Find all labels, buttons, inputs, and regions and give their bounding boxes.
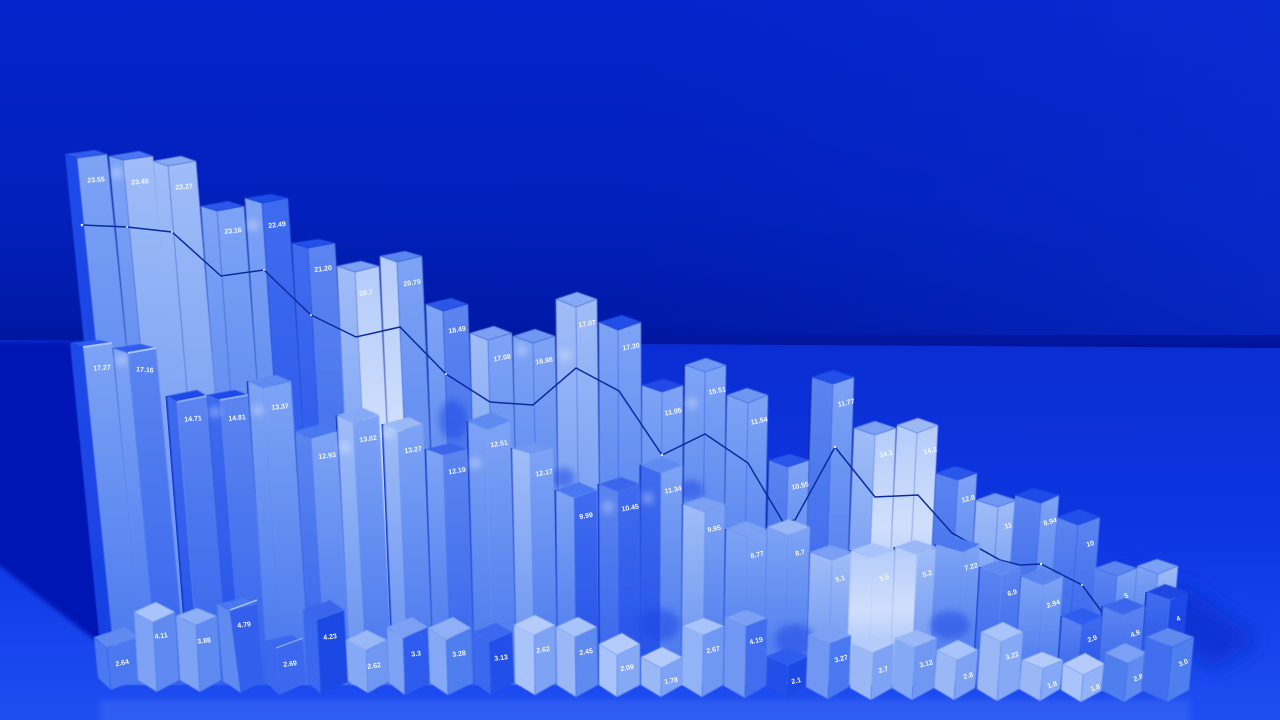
middle bar 9.95: 9.95 — [707, 525, 722, 534]
back bar 23.45: 23.45 — [131, 178, 149, 187]
middle bar 5.1: 5.1 — [835, 575, 846, 584]
middle bar 4.9: 4.9 — [1130, 629, 1141, 639]
wall light on the right — [640, 0, 1280, 335]
back bar 14.2 — [886, 418, 938, 650]
back bar 11.77: 11.77 — [837, 398, 856, 409]
front bar 2.7: 2.7 — [878, 666, 889, 675]
back bar 17.08 — [470, 326, 520, 650]
middle bar 5.5 — [846, 543, 895, 685]
middle bar 10.45 — [599, 477, 641, 685]
middle bar 11.34 — [640, 457, 682, 685]
front bar 3.13: 3.13 — [494, 654, 509, 663]
back bar 10 — [1047, 509, 1100, 650]
front bar 2.8 right: 2.8 — [1133, 673, 1144, 683]
front bar 2.62: 2.62 — [367, 662, 382, 671]
floor reflection of bars — [100, 700, 1190, 720]
back bar 20.79: 20.79 — [403, 279, 421, 288]
middle bar 12.19 — [426, 443, 475, 685]
middle bar 17.27 — [70, 340, 146, 685]
middle bar 9.99 — [556, 482, 599, 685]
middle bar 14.71: 14.71 — [184, 415, 202, 424]
front bar 3.22 — [977, 622, 1023, 701]
front bar 2.1: 2.1 — [791, 677, 802, 686]
middle bar 13.02: 13.02 — [359, 435, 377, 444]
front bar 3.3 — [387, 617, 430, 695]
front bar 2.7 — [850, 635, 894, 700]
glow spots on middle row — [116, 354, 654, 513]
front bar 3.0 — [1141, 628, 1194, 702]
front bar 2.62 centre — [514, 615, 556, 695]
back bar 17.07: 17.07 — [578, 319, 597, 329]
back bar 5: 5 — [1124, 592, 1129, 600]
middle bar 17.16: 17.16 — [136, 366, 154, 375]
front bar 4.79: 4.79 — [237, 621, 252, 630]
middle bar 2.94 — [1014, 568, 1063, 685]
back bar 11.95: 11.95 — [664, 407, 682, 418]
front bar 4.23 — [303, 600, 348, 694]
back bar 11.77 — [803, 370, 856, 650]
middle bar 2.94: 2.94 — [1046, 599, 1061, 610]
back bar 20.79 — [380, 251, 439, 650]
back bar 10: 10 — [1086, 540, 1095, 549]
back bar 21.20 — [292, 239, 359, 650]
middle bar 6.9 — [973, 560, 1021, 685]
background wall — [0, 0, 1280, 348]
back bar 17.20: 17.20 — [622, 342, 641, 352]
middle bar 17.16 — [113, 344, 187, 685]
back bar 14.1 — [845, 421, 896, 650]
front bar 2.62 — [346, 630, 389, 693]
front bar 1.8 right: 1.8 — [1090, 683, 1101, 693]
back bar 8.94: 8.94 — [1043, 517, 1058, 528]
front bar 2.67 — [682, 618, 724, 697]
middle bar 5.2 — [889, 540, 937, 685]
middle bar 9.95 — [681, 497, 725, 685]
front row of bars — [94, 598, 1194, 702]
front bar 2.1 — [766, 648, 808, 698]
back bar 14.2: 14.2 — [923, 446, 938, 457]
back bar 17.07 — [556, 292, 601, 650]
middle bar 6.9: 6.9 — [1007, 589, 1018, 598]
front bar 2.09 — [599, 633, 640, 697]
back bar 23.27: 23.27 — [175, 183, 193, 192]
middle bar 17.27: 17.27 — [93, 364, 111, 373]
middle bar 8.7 — [763, 519, 810, 685]
front bar 3.88 — [176, 608, 221, 692]
middle bar 9.99: 9.99 — [579, 512, 594, 521]
back bar 20.7: 20.7 — [359, 289, 374, 298]
back bar 12.8: 12.8 — [961, 494, 976, 505]
seams — [109, 156, 1137, 650]
back bar 11.95 — [641, 379, 683, 650]
back bar 15.51 — [682, 358, 727, 650]
middle bar 7.22 — [928, 537, 980, 685]
front bar 1.8 right — [1061, 653, 1105, 702]
back bar 11.54 — [722, 388, 769, 650]
back bar 23.55 — [65, 150, 157, 650]
front bar 1.78: 1.78 — [664, 677, 679, 686]
middle bar 12.93 — [295, 424, 352, 685]
front bar 3.12: 3.12 — [919, 659, 934, 670]
middle bar 5.1 — [806, 545, 852, 685]
middle bar 12.17 — [512, 443, 558, 685]
front bar 3.13 — [473, 623, 514, 695]
middle bar 13.37 — [248, 375, 311, 685]
middle bar 12.19: 12.19 — [448, 467, 467, 476]
middle bar 10.45: 10.45 — [621, 503, 640, 513]
middle bar 5.5: 5.5 — [879, 574, 890, 583]
middle bar 5.2: 5.2 — [922, 570, 933, 579]
back bar 8.94 — [1004, 488, 1059, 650]
front bar 2.8: 2.8 — [963, 672, 974, 681]
seams — [113, 348, 1147, 685]
back bar 10.55 — [764, 454, 810, 650]
back bar 21.20: 21.20 — [314, 265, 332, 274]
dark blotches above front row — [640, 609, 970, 656]
front bar 3.28 — [428, 617, 473, 695]
middle bar 12.17: 12.17 — [535, 468, 554, 478]
back bar 18.49 — [426, 298, 480, 650]
floor shadow left — [0, 342, 112, 650]
trend line — [81, 224, 1102, 612]
middle bar 13.27 — [383, 417, 434, 685]
front bar 3.88: 3.88 — [197, 637, 212, 646]
front bar 2.09: 2.09 — [620, 664, 635, 673]
middle bar 12.93: 12.93 — [318, 452, 336, 461]
back bar 17.08: 17.08 — [493, 353, 512, 363]
back bar 5 — [1089, 561, 1137, 650]
back bar 23.16: 23.16 — [224, 227, 242, 236]
front bar 2.69 — [264, 635, 306, 695]
back bar 23.55: 23.55 — [87, 176, 105, 185]
middle bar 8.77: 8.77 — [750, 550, 765, 560]
back bar 12.8 — [926, 466, 977, 650]
front bar 4.11 — [134, 602, 179, 692]
middle bar 11.34: 11.34 — [664, 485, 682, 496]
back bar 18.49: 18.49 — [448, 326, 467, 335]
middle bar 4.9 — [1097, 598, 1145, 685]
front bar 2.8 right — [1101, 643, 1148, 702]
back row of bars — [65, 150, 1178, 650]
back bar 11: 11 — [1004, 522, 1013, 531]
front bar 2.8 — [934, 640, 978, 700]
middle bar 4: 4 — [1175, 615, 1182, 623]
middle bar 12.51: 12.51 — [490, 440, 509, 449]
middle bar 14.81 — [207, 390, 270, 685]
middle bar 8.7: 8.7 — [795, 549, 806, 558]
back bar unlabelled end — [1130, 559, 1178, 650]
back bar 14.1: 14.1 — [879, 449, 894, 459]
back bar 23.45 — [109, 151, 199, 650]
front bar 3.22: 3.22 — [1005, 651, 1020, 662]
front bar 2.45: 2.45 — [579, 648, 594, 657]
back bar 11 — [967, 493, 1017, 650]
front bar 4.11: 4.11 — [154, 632, 168, 641]
floor shadow right — [1120, 570, 1260, 670]
front bar 3.28: 3.28 — [452, 650, 467, 659]
middle bar 2.9 — [1057, 608, 1102, 685]
front bar 2.69: 2.69 — [283, 660, 298, 669]
middle bar 4 — [1139, 584, 1188, 685]
middle bar 8.77 — [723, 521, 767, 685]
front bar 2.64: 2.64 — [115, 659, 130, 668]
back bar 22.49 — [245, 194, 318, 650]
back bar 15.51: 15.51 — [708, 386, 727, 397]
back bar 16.98: 16.98 — [535, 356, 554, 366]
middle bar 7.22: 7.22 — [964, 562, 979, 573]
back bar 23.27 — [153, 156, 237, 650]
middle bar 13.02 — [337, 408, 393, 685]
front bar 4.23: 4.23 — [323, 633, 338, 642]
middle bar 13.37: 13.37 — [271, 403, 289, 412]
back bar 22.49: 22.49 — [268, 221, 286, 230]
front bar 3.27 — [806, 627, 851, 699]
front bar 1.78 — [641, 647, 682, 697]
back bar 11.54: 11.54 — [750, 416, 769, 427]
middle bar 2.9: 2.9 — [1087, 634, 1098, 644]
middle bar 14.71 — [167, 390, 230, 685]
middle row of bars — [70, 340, 1188, 685]
front bar 3.0: 3.0 — [1178, 658, 1190, 669]
front bar 2.64 — [94, 627, 142, 690]
floor — [0, 340, 1280, 720]
front bar 2.67: 2.67 — [706, 646, 721, 655]
back bar 16.98 — [513, 329, 561, 650]
front bar 1.8 — [1019, 652, 1063, 701]
back bar 23.16 — [201, 201, 277, 650]
back bar 17.20 — [599, 315, 642, 650]
front bar 3.27: 3.27 — [834, 654, 849, 664]
front bar 3.12 — [892, 630, 937, 700]
back bar 10.55: 10.55 — [791, 481, 810, 492]
front bar 2.62 centre: 2.62 — [536, 646, 551, 655]
glow spots on back row — [111, 167, 698, 409]
front bar 4.19 — [724, 610, 767, 698]
middle bar 12.51 — [468, 412, 517, 685]
front bar 1.8: 1.8 — [1047, 681, 1058, 690]
front bar 3.3: 3.3 — [411, 650, 422, 659]
front bar 2.45 — [556, 617, 598, 697]
front bar 4.79 — [217, 598, 263, 693]
front bar 4.19: 4.19 — [749, 636, 764, 646]
middle bar 13.27: 13.27 — [404, 446, 422, 455]
back bar 20.7 — [337, 261, 398, 650]
middle bar 14.81: 14.81 — [228, 414, 246, 423]
dark blotches between rows — [439, 400, 704, 500]
